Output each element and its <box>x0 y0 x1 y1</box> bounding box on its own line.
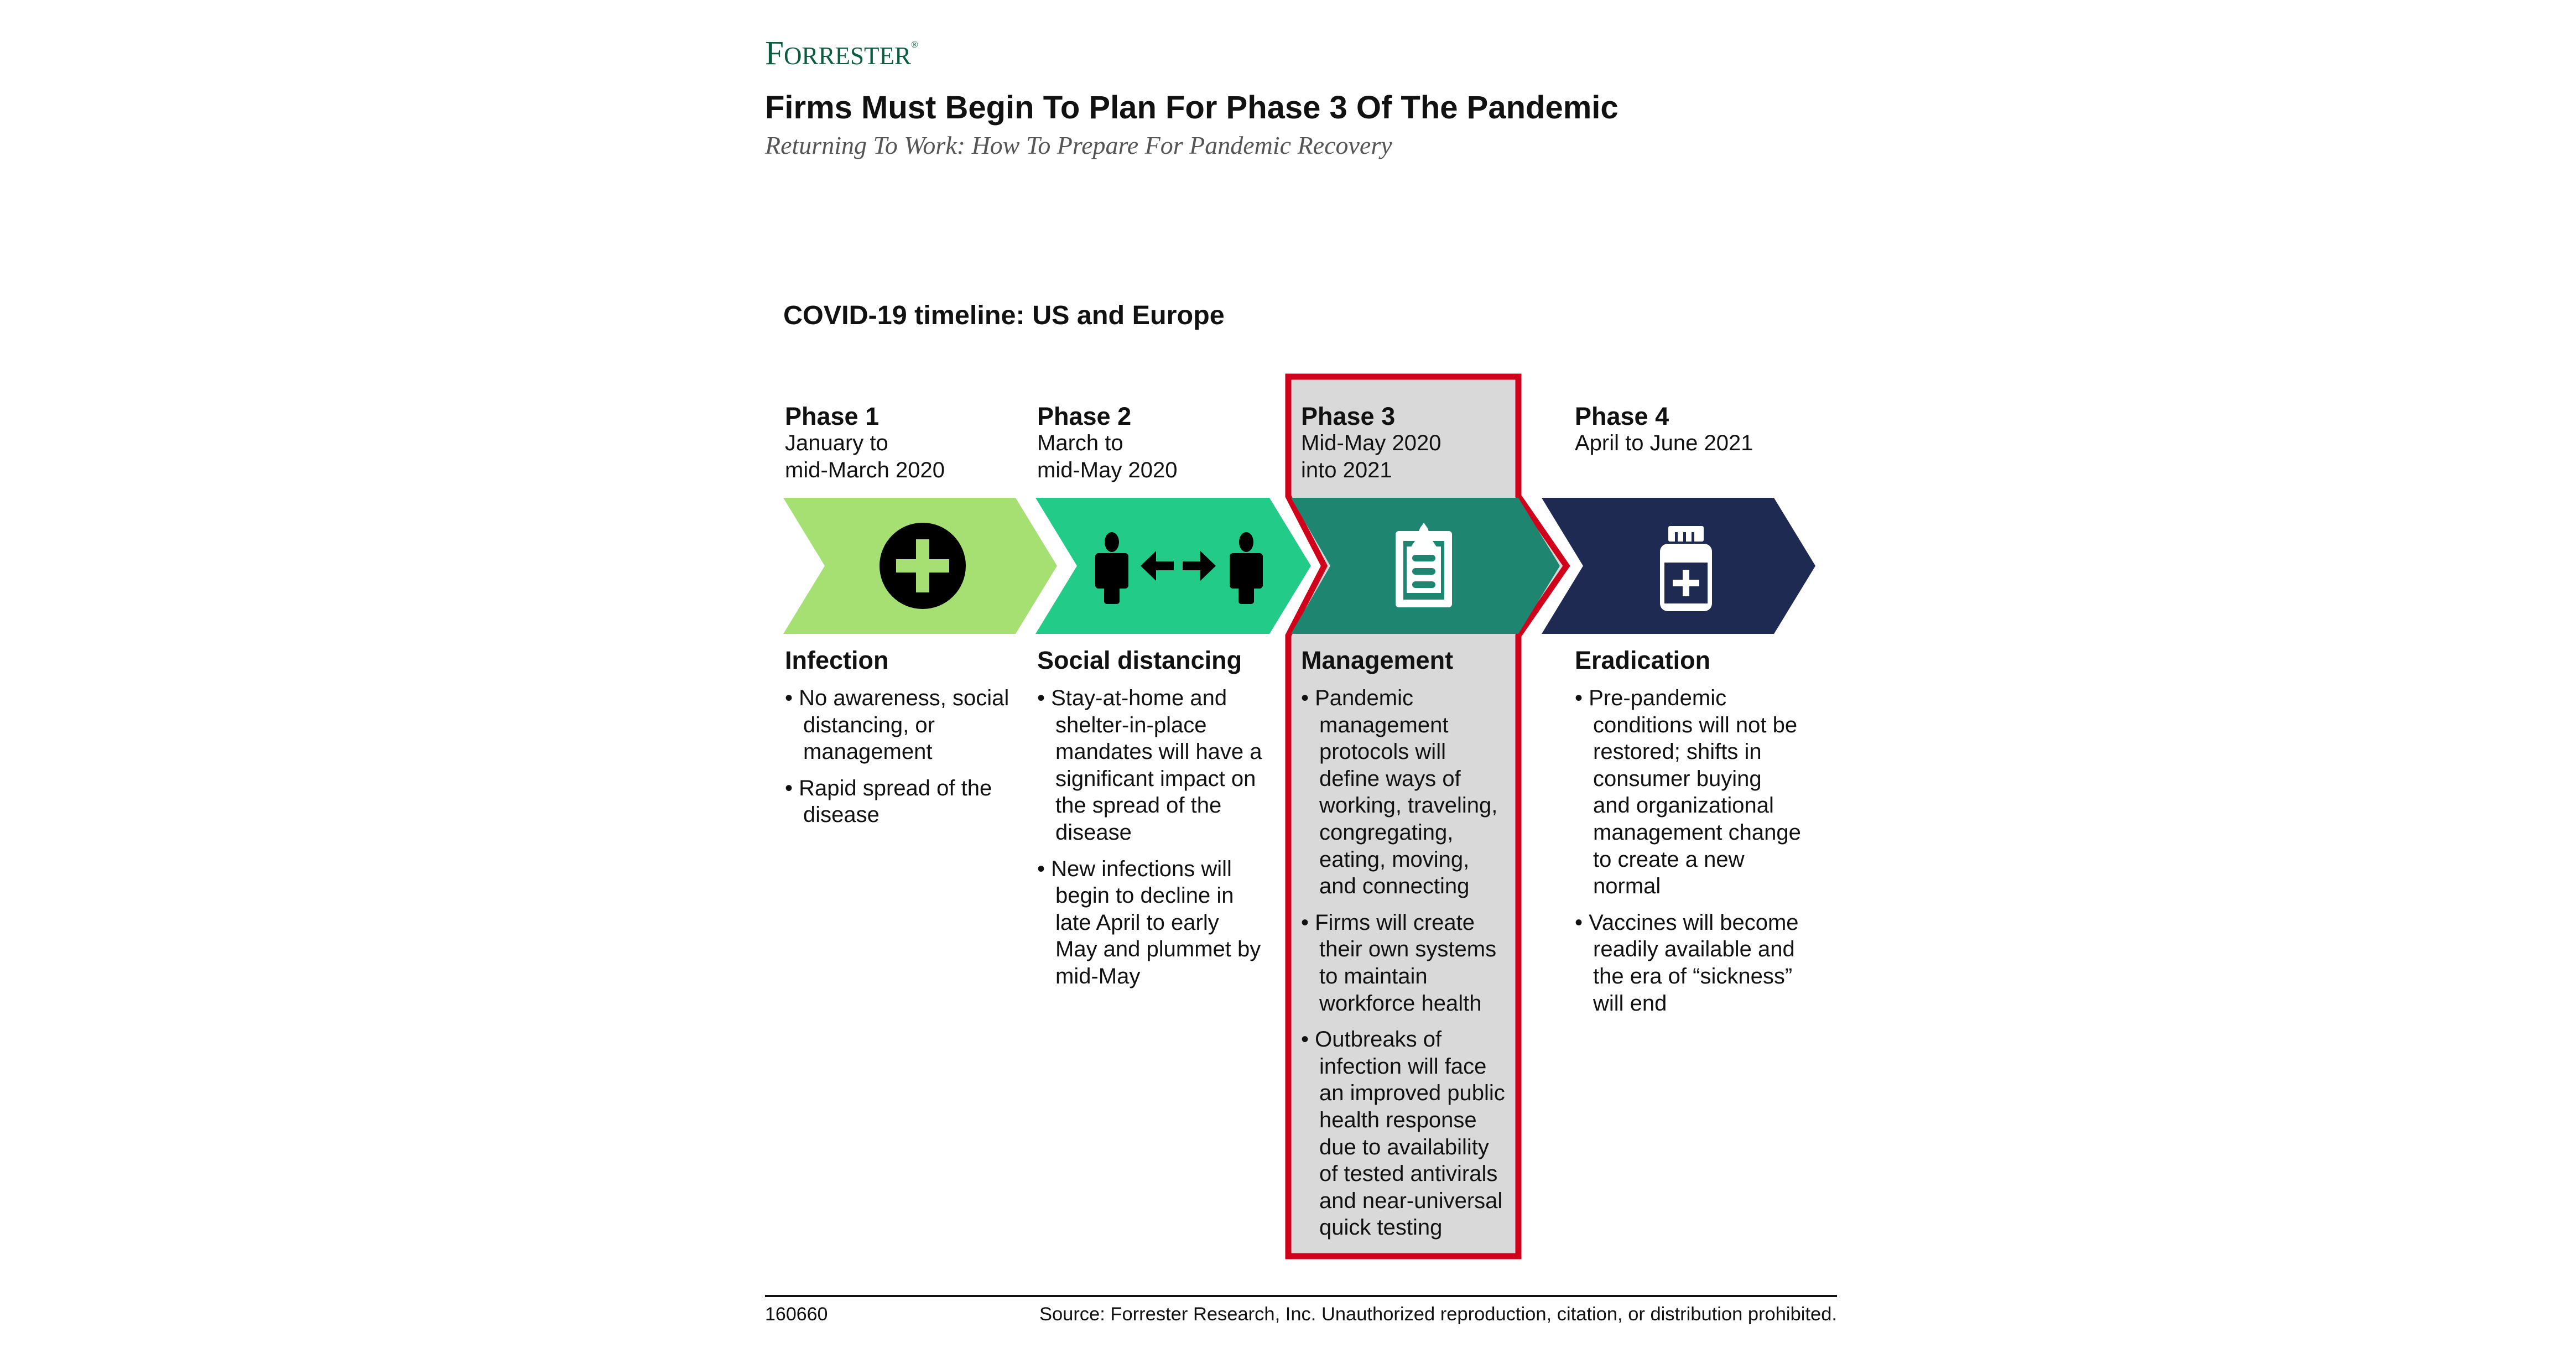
phase 3 body: Management <box>1301 646 1453 674</box>
chevron: phase 4 <box>1542 498 1815 634</box>
phase 2 body: the spread of the <box>1055 793 1221 818</box>
phase 2 body: mandates will have a <box>1055 740 1262 764</box>
phase 2 body <box>1037 646 1262 988</box>
phase 3 body: • Pandemic <box>1301 686 1413 710</box>
chevron: phase 2 <box>1035 498 1311 634</box>
phase 4 body: readily available and <box>1593 937 1795 961</box>
icon: social distancing people <box>1095 532 1263 604</box>
phase 3 body: to maintain <box>1319 964 1428 988</box>
phase 1 header <box>785 402 945 482</box>
footer id: 160660 <box>765 1304 828 1325</box>
phase 4 header: April to June 2021 <box>1575 431 1753 455</box>
phase 3 body: due to availability <box>1319 1135 1489 1159</box>
phase 1 body: distancing, or <box>803 713 935 737</box>
phase 3 body: • Outbreaks of <box>1301 1027 1441 1052</box>
phase 3 body: • Firms will create <box>1301 910 1475 935</box>
phase 3 header: Mid-May 2020 <box>1301 431 1441 455</box>
phase 2 body: Social distancing <box>1037 646 1242 674</box>
phase 4 body: consumer buying <box>1593 767 1762 791</box>
phase 3 body: management <box>1319 713 1448 737</box>
phase 1 body: Infection <box>785 646 888 674</box>
phase 1 header: Phase 1 <box>785 402 879 430</box>
phase 3 header <box>1301 402 1441 482</box>
phase 4 body: restored; shifts in <box>1593 740 1762 764</box>
phase 3 body: working, traveling, <box>1319 793 1497 818</box>
phase 1 header: mid-March 2020 <box>785 458 945 482</box>
phase 2 body: mid-May <box>1055 964 1140 988</box>
phase 4 body: Eradication <box>1575 646 1710 674</box>
phase 4 body: the era of “sickness” <box>1593 964 1792 988</box>
phase 1 body: • Rapid spread of the <box>785 776 992 800</box>
phase 2 header: mid-May 2020 <box>1037 458 1177 482</box>
chart heading: COVID-19 timeline: US and Europe <box>783 300 1225 330</box>
phase 4 body: will end <box>1593 991 1667 1016</box>
phase 4 body: • Pre-pandemic <box>1575 686 1726 710</box>
phase 3 body: and connecting <box>1319 874 1469 898</box>
phase 4 body: • Vaccines will become <box>1575 910 1799 935</box>
phase 2 body: shelter-in-place <box>1055 713 1206 737</box>
phase 4 body: to create a new <box>1593 847 1745 872</box>
phase 2 header: Phase 2 <box>1037 402 1131 430</box>
phase 3 highlight box <box>1288 377 1567 1256</box>
phase 3 header: into 2021 <box>1301 458 1392 482</box>
logo: FORRESTER® <box>765 35 918 72</box>
phase 4 body: and organizational <box>1593 793 1774 818</box>
icon: clipboard <box>1396 523 1452 607</box>
phase 2 header: March to <box>1037 431 1123 455</box>
phase 4 header <box>1575 402 1753 455</box>
title: Firms Must Begin To Plan For Phase 3 Of The Pandemic <box>765 90 1619 126</box>
phase 1 body <box>785 646 1009 827</box>
phase 1 body: management <box>803 740 932 764</box>
subtitle: Returning To Work: How To Prepare For Pandemic Recovery <box>765 131 1392 159</box>
phase 2 body: disease <box>1055 820 1132 845</box>
phase 3 body: their own systems <box>1319 937 1496 961</box>
phase 2 body: significant impact on <box>1055 767 1256 791</box>
chevron: phase 1 <box>783 498 1057 634</box>
phase 1 body: • No awareness, social <box>785 686 1009 710</box>
phase 1 body: disease <box>803 803 880 827</box>
phase 2 body: May and plummet by <box>1055 937 1261 961</box>
footer source: Source: Forrester Research, Inc. Unauthorized reproduction, citation, or distribution prohibited. <box>1039 1304 1837 1325</box>
phase 3 body: define ways of <box>1319 767 1461 791</box>
icon: plus circle <box>880 523 966 609</box>
phase 4 header: Phase 4 <box>1575 402 1669 430</box>
phase 4 body: normal <box>1593 874 1661 898</box>
phase 3 body: congregating, <box>1319 820 1453 845</box>
phase 4 body: management change <box>1593 820 1801 845</box>
phase 3 body: of tested antivirals <box>1319 1162 1497 1186</box>
phase 1 header: January to <box>785 431 888 455</box>
phase 3 header: Phase 3 <box>1301 402 1395 430</box>
phase 2 header <box>1037 402 1177 482</box>
phase 3 body: health response <box>1319 1108 1477 1132</box>
phase 3 body: workforce health <box>1319 991 1481 1016</box>
phase 3 body: an improved public <box>1319 1081 1505 1105</box>
phase 3 body <box>1301 646 1505 1240</box>
phase 3 body: eating, moving, <box>1319 847 1469 872</box>
phase 3 body: and near-universal <box>1319 1189 1502 1213</box>
phase 3 body: quick testing <box>1319 1215 1442 1240</box>
phase 3 body: infection will face <box>1319 1054 1486 1079</box>
phase 4 body <box>1575 646 1801 1016</box>
phase 2 body: • New infections will <box>1037 857 1232 881</box>
footer rule <box>765 1295 1837 1297</box>
phase 4 body: conditions will not be <box>1593 713 1797 737</box>
phase 2 body: begin to decline in <box>1055 883 1234 908</box>
phase 3 body: protocols will <box>1319 740 1446 764</box>
icon: medicine bottle <box>1660 526 1712 611</box>
phase 2 body: late April to early <box>1055 910 1219 935</box>
phase 2 body: • Stay-at-home and <box>1037 686 1227 710</box>
chevron: phase 3 <box>1291 498 1560 634</box>
